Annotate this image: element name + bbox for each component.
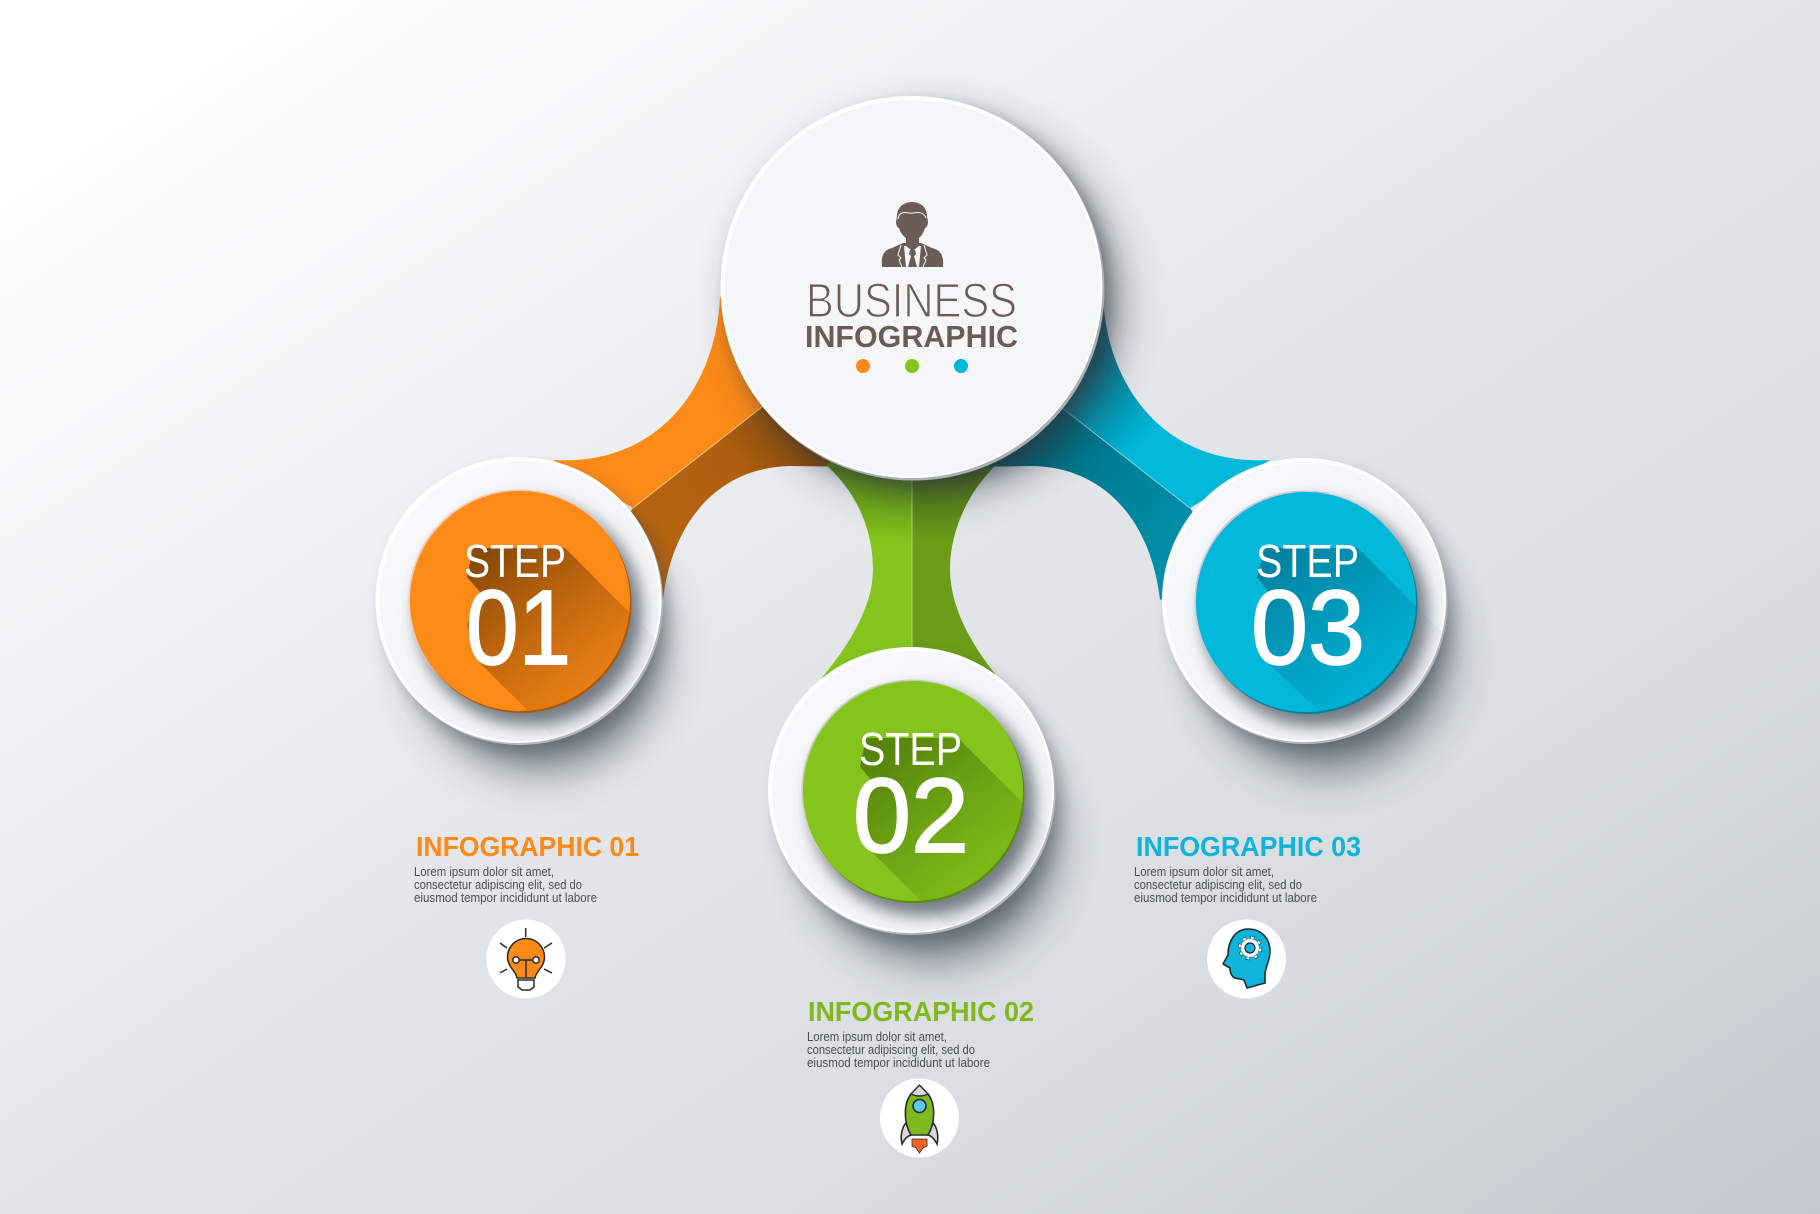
- step 01 number: 01: [466, 569, 571, 687]
- body 02: eiusmod tempor incididunt ut labore: [807, 1056, 990, 1070]
- step 03 label: STEP: [1256, 535, 1359, 587]
- body 03: eiusmod tempor incididunt ut labore: [1134, 891, 1317, 905]
- icon: rocket: [880, 1078, 959, 1158]
- body 03: [1134, 865, 1317, 905]
- text block: infographic 01: [414, 831, 639, 905]
- body 02: [807, 1030, 990, 1070]
- icon: light bulb: [486, 920, 566, 998]
- text block: infographic 02: [807, 996, 1034, 1070]
- heading 02: INFOGRAPHIC 02: [808, 996, 1034, 1027]
- panel: central circle: [720, 96, 1118, 493]
- body 01: [414, 865, 597, 905]
- body 01: eiusmod tempor incididunt ut labore: [414, 891, 597, 905]
- heading 01: INFOGRAPHIC 01: [416, 831, 639, 862]
- connector: green: [820, 400, 1000, 680]
- panel: step 03: [1162, 458, 1498, 770]
- body 01: Lorem ipsum dolor sit amet,: [414, 865, 554, 879]
- body 03: Lorem ipsum dolor sit amet,: [1134, 865, 1274, 879]
- step 02 label: STEP: [859, 723, 962, 775]
- step 03 number: 03: [1251, 569, 1365, 687]
- heading 03: INFOGRAPHIC 03: [1136, 831, 1361, 862]
- body 01: consectetur adipiscing elit, sed do: [414, 878, 582, 892]
- step 02 number: 02: [853, 757, 969, 875]
- icon: businessman: [882, 202, 943, 267]
- connector: orange: [553, 297, 860, 600]
- title: infographic: INFOGRAPHIC: [805, 320, 1018, 354]
- body 02: Lorem ipsum dolor sit amet,: [807, 1030, 947, 1044]
- panel: step 02: [768, 647, 1098, 960]
- colour dots: [856, 359, 968, 373]
- panel: step 01: [376, 457, 705, 770]
- icon: head with gear: [1207, 920, 1286, 998]
- body 02: consectetur adipiscing elit, sed do: [807, 1043, 975, 1057]
- title: business: BUSINESS: [806, 275, 1017, 328]
- step 01 label: STEP: [464, 535, 566, 587]
- connector: blue: [963, 297, 1270, 600]
- text block: infographic 03: [1134, 831, 1361, 905]
- body 03: consectetur adipiscing elit, sed do: [1134, 878, 1302, 892]
